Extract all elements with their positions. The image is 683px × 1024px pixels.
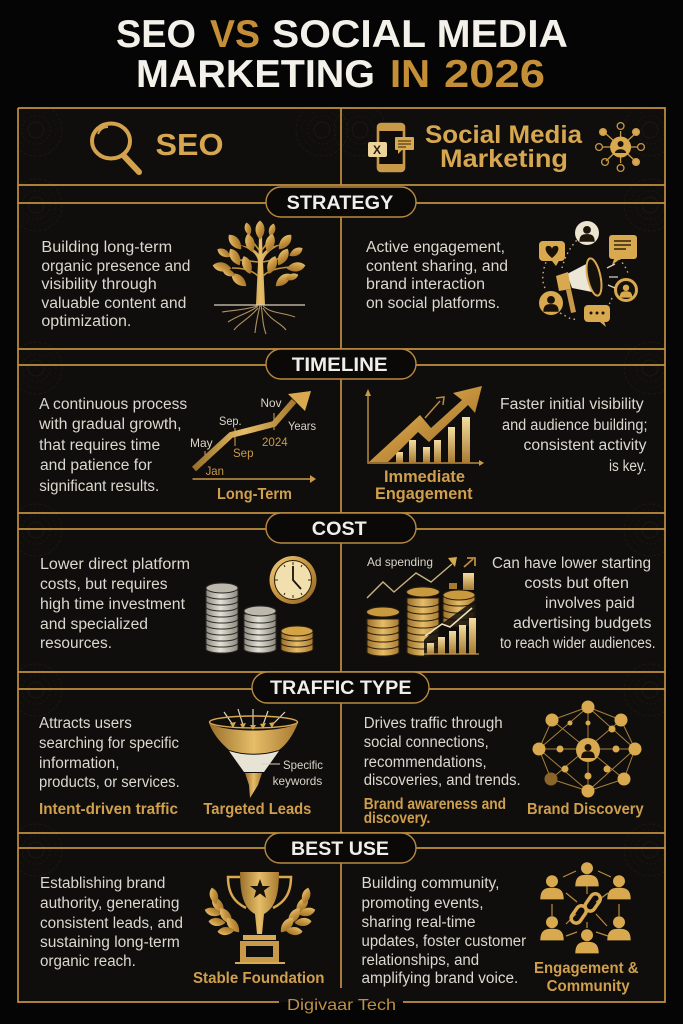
label: targeted leads: Targeted Leads	[203, 801, 311, 818]
text block: Lower direct platform	[40, 556, 190, 573]
panel: timeline SEO	[38, 391, 316, 503]
chart: long-term growth arrow: Sep.	[219, 414, 242, 428]
text block: resources.	[40, 635, 112, 652]
text block	[40, 875, 183, 970]
text block	[364, 715, 521, 789]
text block: social connections,	[364, 734, 489, 751]
label: brand discovery: Brand Discovery	[527, 801, 644, 818]
text block: high time investment	[40, 596, 186, 613]
heading: Social Media Marketing: Marketing	[440, 145, 568, 173]
title line 1	[116, 13, 568, 56]
label: intent-driven traffic: Intent-driven traffic	[39, 801, 178, 818]
heading: Social Media Marketing	[425, 121, 583, 173]
text block: authority, generating	[40, 895, 179, 912]
section pill: COST: COST	[312, 519, 367, 540]
section pill: TRAFFIC TYPE	[252, 672, 429, 703]
section pill: TIMELINE	[266, 349, 416, 379]
label: engagement and community	[534, 960, 638, 995]
icon: funnel: keywords	[273, 774, 322, 788]
text block: amplifying brand voice.	[362, 970, 518, 987]
text block: updates, foster customer	[362, 933, 526, 950]
text block	[362, 875, 526, 987]
text block: content sharing, and	[366, 258, 508, 275]
text block: Attracts users	[39, 715, 132, 732]
text block: promoting events,	[362, 895, 484, 912]
title line 2: 2026	[444, 53, 545, 96]
text block: Drives traffic through	[364, 715, 503, 732]
icon: funnel: Specific	[283, 758, 323, 772]
text block: Faster initial visibility	[500, 396, 644, 413]
label: Ad spending: Ad spending	[367, 555, 433, 569]
text block: and patience for	[40, 457, 152, 474]
icon: silver stack medium	[244, 606, 276, 653]
text block: consistent leads, and	[40, 915, 183, 932]
icon: community with chain link	[540, 862, 631, 953]
text block: brand interaction	[366, 276, 485, 293]
text block: costs but often	[524, 575, 629, 592]
icon: phone with chat	[368, 124, 414, 171]
text block: significant results.	[39, 478, 159, 495]
heading: Social Media Marketing: Social Media	[425, 121, 583, 149]
label: brand awareness	[364, 796, 506, 827]
chart: long-term growth arrow: Long-Term	[217, 486, 292, 503]
text block: Building long-term	[41, 239, 172, 256]
text block: advertising budgets	[513, 615, 652, 632]
text block: Building community,	[362, 875, 500, 892]
icon: silver stack tall	[206, 583, 238, 653]
section pill: TRAFFIC TYPE: TRAFFIC TYPE	[270, 678, 412, 699]
chart: long-term growth arrow: 2024	[262, 435, 288, 449]
title line 1: VS	[210, 13, 260, 56]
chart: immediate engagement: Engagement	[375, 484, 473, 503]
chart: long-term growth arrow: Years	[288, 419, 316, 433]
title line 2	[136, 53, 545, 96]
text block	[38, 396, 187, 495]
text block: involves paid	[545, 595, 635, 612]
text block: is key.	[609, 458, 646, 475]
panel: cost social	[366, 555, 656, 656]
section pill: STRATEGY: STRATEGY	[287, 193, 394, 214]
text block: and audience building;	[502, 417, 648, 434]
text block: consistent activity	[524, 437, 647, 454]
text block: visibility through	[41, 276, 157, 293]
text block: recommendations,	[364, 754, 487, 771]
text block: organic reach.	[40, 953, 136, 970]
section pill: TIMELINE: TIMELINE	[292, 355, 388, 376]
chart: immediate engagement: Immediate	[384, 467, 465, 486]
text block	[492, 555, 656, 652]
text block: and specialized	[40, 616, 148, 633]
text block: Active engagement,	[366, 239, 505, 256]
text block	[39, 715, 180, 791]
text block: sharing real-time	[362, 914, 476, 931]
text block	[41, 239, 190, 330]
text block: information,	[39, 755, 120, 772]
icon: phone with chat: X	[373, 143, 381, 157]
section pill: BEST USE: BEST USE	[291, 839, 389, 860]
title line 2: MARKETING	[136, 53, 375, 96]
panel: traffic SEO	[39, 709, 323, 818]
text block: relationships, and	[362, 952, 479, 969]
icon: network person	[596, 123, 644, 171]
title line 1: SOCIAL MEDIA	[272, 13, 568, 56]
label: engagement and community: Engagement &	[534, 960, 638, 977]
label: brand awareness: Brand awareness and	[364, 796, 506, 813]
header: Social Media Marketing	[368, 121, 644, 173]
section pill: BEST USE	[265, 833, 416, 863]
heading: SEO: SEO	[156, 127, 224, 162]
icon: clock	[270, 556, 316, 604]
text block: optimization.	[41, 313, 131, 330]
chart: long-term growth arrow: Sep	[233, 446, 254, 460]
text block	[500, 396, 648, 475]
text block: discoveries, and trends.	[364, 772, 521, 789]
title	[116, 13, 568, 96]
label: stable foundation: Stable Foundation	[193, 970, 324, 987]
title line 1: SEO	[116, 13, 196, 56]
text block: searching for specific	[39, 735, 179, 752]
text block: with gradual growth,	[38, 416, 182, 433]
section pill: STRATEGY	[266, 187, 416, 217]
chart: immediate engagement	[365, 386, 484, 503]
text block: to reach wider audiences.	[500, 635, 656, 652]
text block	[40, 556, 190, 652]
chart: long-term growth arrow: May	[190, 436, 213, 450]
icon: magnifying glass	[92, 124, 139, 172]
panel: cost SEO	[40, 556, 316, 653]
text block: Establishing brand	[40, 875, 165, 892]
text block: that requires time	[39, 437, 160, 454]
text block	[366, 239, 508, 312]
text block: products, or services.	[39, 774, 180, 791]
text block: Can have lower starting	[492, 555, 651, 572]
chart: long-term growth arrow: Nov	[260, 396, 282, 410]
icon: gold stack small	[281, 626, 313, 653]
panel: best use SEO	[40, 872, 324, 987]
icon: tree with roots	[212, 220, 306, 334]
panel: strategy SEO	[41, 220, 306, 334]
text block: sustaining long-term	[40, 934, 180, 951]
icon: megaphone with social bubbles	[539, 221, 638, 327]
title line 2: IN	[390, 53, 430, 96]
panel: strategy social	[366, 221, 638, 327]
text block: valuable content and	[41, 295, 186, 312]
icon: funnel	[209, 709, 323, 798]
section pill: COST	[266, 513, 416, 543]
icon: trophy with laurels	[204, 872, 316, 964]
label: brand awareness: discovery.	[364, 810, 430, 827]
footer: Digivaar Tech: Digivaar Tech	[287, 997, 396, 1014]
label: engagement and community: Community	[547, 978, 630, 995]
text block: costs, but requires	[40, 576, 168, 593]
chart: ad spending coins and bars	[366, 557, 479, 656]
header: SEO	[92, 124, 224, 172]
text block: organic presence and	[41, 258, 190, 275]
panel: timeline social	[365, 386, 648, 503]
text block: A continuous process	[39, 396, 187, 413]
text block: on social platforms.	[366, 295, 500, 312]
chart: long-term growth arrow: Jan	[206, 464, 224, 478]
panel: best use social	[362, 862, 638, 995]
icon: brand discovery network	[532, 700, 642, 798]
chart: long-term growth arrow	[190, 391, 316, 503]
panel: traffic social	[364, 700, 644, 827]
